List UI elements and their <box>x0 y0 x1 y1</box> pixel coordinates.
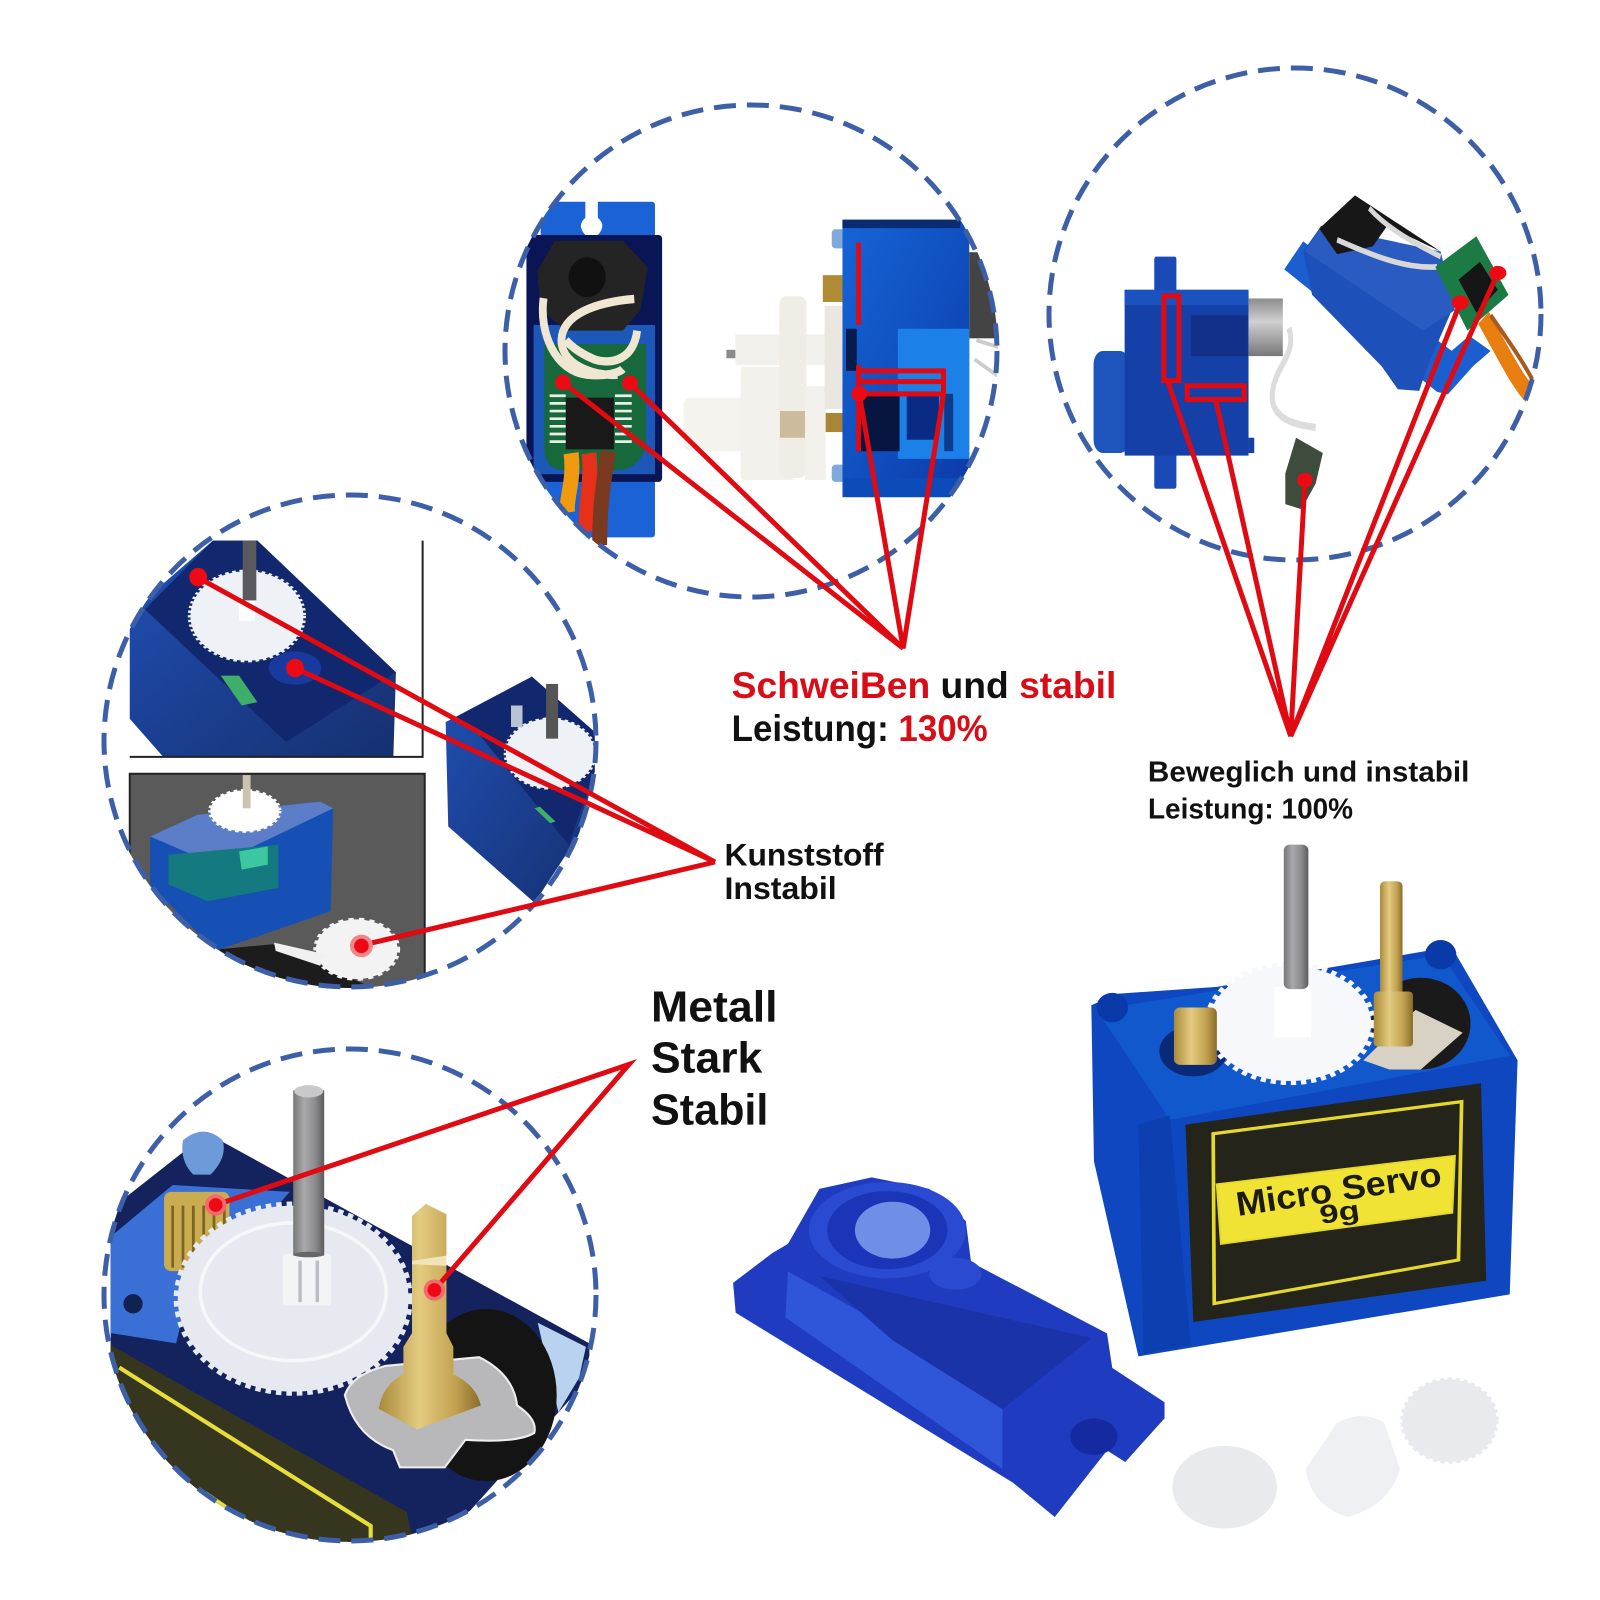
heading: welded and stable <box>732 665 1116 749</box>
caption: plastic unstable: Instabil <box>724 870 837 906</box>
servo housing <box>1091 940 1518 1356</box>
red markers <box>205 1064 629 1301</box>
caption: movable and unstable: Beweglich und instabil <box>1148 757 1469 789</box>
left servo, side view with motor <box>1094 257 1323 509</box>
pillar nut <box>182 1132 224 1175</box>
steel shaft <box>1284 845 1308 989</box>
servo cover <box>733 1177 1165 1517</box>
caption: movable and unstable <box>1148 757 1469 825</box>
brass pinion <box>164 1192 229 1271</box>
label text: Micro Servo 9g: 9g <box>1317 1194 1361 1230</box>
black potentiometer opening <box>1371 978 1471 1070</box>
right servo, open with circuit board <box>1284 195 1534 394</box>
caption: plastic unstable <box>724 836 884 906</box>
brass pinion <box>1174 1008 1217 1065</box>
panel: welded servo detail (top centre) <box>505 105 1001 648</box>
lower inset: servo on grey background <box>130 774 425 1011</box>
potentiometer housing <box>446 1309 557 1482</box>
panel: loose wire servo detail (top right) <box>1049 68 1541 736</box>
right servo, side view <box>832 220 1001 497</box>
servo body top <box>111 1133 589 1540</box>
upper inset: servo top with white gear <box>130 541 423 757</box>
label corner <box>111 1345 414 1547</box>
caption: metal strong stable: Metall <box>651 982 778 1031</box>
red markers <box>189 568 715 957</box>
label <box>1185 1083 1486 1322</box>
white gear <box>1209 966 1371 1081</box>
white gear <box>178 1206 409 1392</box>
red markers <box>1164 266 1506 736</box>
caption: plastic unstable: Kunststoff <box>724 836 884 872</box>
white plastic gear train <box>684 275 847 480</box>
heading: welded and stable: Leistung: 130% <box>732 708 988 749</box>
white spare gears <box>1172 1379 1497 1528</box>
brass potentiometer shaft <box>379 1204 481 1430</box>
panel: plastic parts detail (middle left) <box>104 495 715 1011</box>
caption: metal strong stable: Stabil <box>651 1085 768 1134</box>
label text: Micro Servo 9g: Micro Servo <box>1234 1156 1444 1224</box>
caption: metal strong stable <box>651 982 778 1134</box>
heading: welded and stable: SchweiBen und stabil <box>732 665 1116 706</box>
silver contact <box>1363 1010 1463 1070</box>
dashed circle <box>104 495 596 987</box>
red markers <box>555 243 944 648</box>
silver plate <box>345 1357 535 1467</box>
panel: micro servo product photo <box>733 845 1518 1528</box>
dashed circle <box>505 105 997 597</box>
caption: movable and unstable: Leistung: 100% <box>1148 793 1353 825</box>
right servo, angled view <box>446 677 595 903</box>
caption: metal strong stable: Stark <box>651 1033 763 1082</box>
left servo, open back with circuit board <box>526 199 662 545</box>
panel: metal gear detail (bottom left) <box>104 1049 629 1547</box>
dashed circle <box>104 1049 596 1541</box>
dashed circle <box>1049 68 1541 560</box>
brass shaft <box>1374 881 1413 1047</box>
steel output shaft <box>293 1085 324 1257</box>
